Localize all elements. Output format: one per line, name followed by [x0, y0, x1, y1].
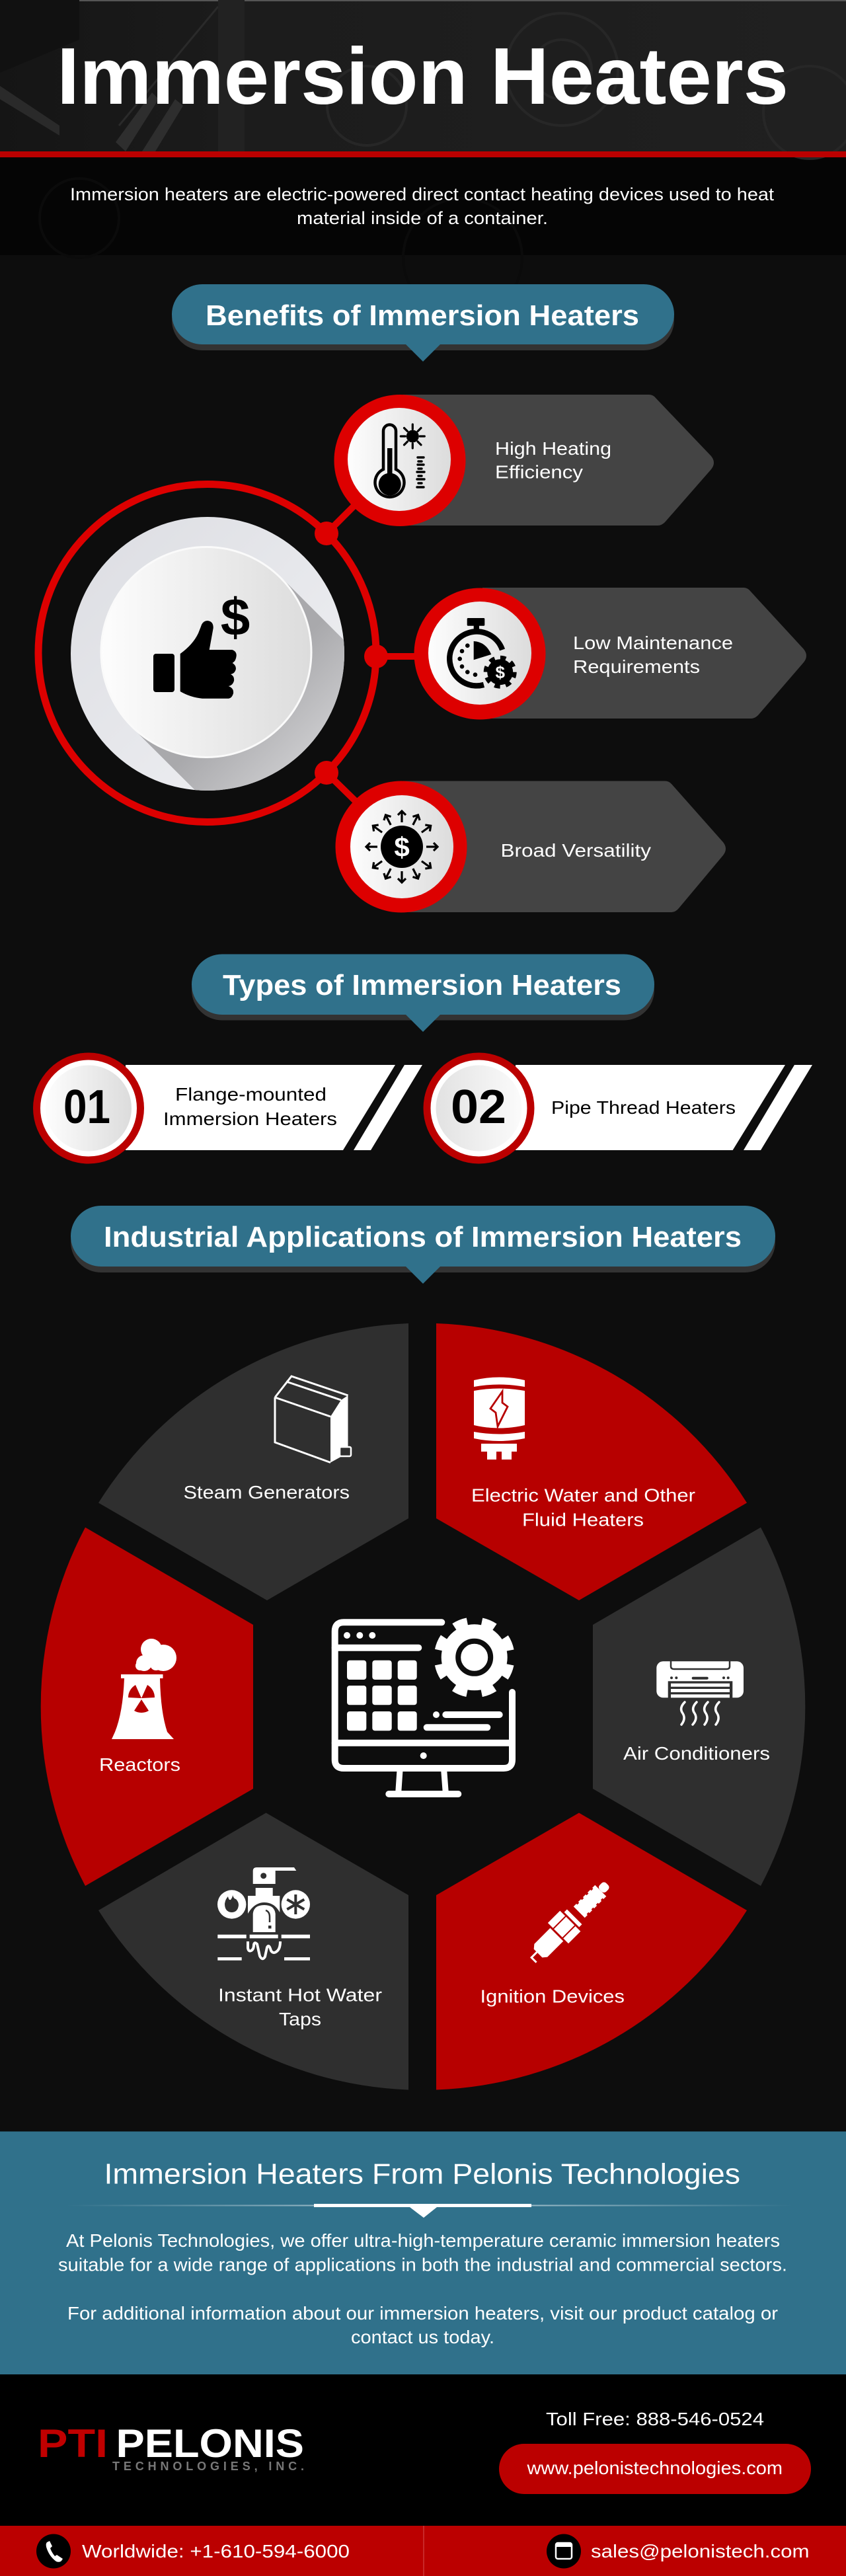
body copy: suitable for a wide range of applications in both the industrial and commercial sectors.	[58, 2254, 787, 2275]
header banner with photo texture	[0, 0, 846, 317]
connectors and ring	[38, 484, 415, 822]
body copy: At Pelonis Technologies, we offer ultra-high-temperature ceramic immersion heaters	[66, 2230, 780, 2251]
benefit: low maintenance: Low Maintenance	[573, 633, 733, 653]
logo: TECHNOLOGIES, INC.	[112, 2460, 304, 2473]
panel: benefits diagram	[38, 395, 806, 912]
heading: types: Types of Immersion Heaters	[223, 969, 621, 1001]
type 01: flange-mounted: Immersion Heaters	[163, 1109, 337, 1129]
segment: air conditioners	[593, 1528, 805, 1886]
segment: steam generators	[98, 1323, 408, 1600]
segment: reactors	[41, 1528, 253, 1886]
heading divider with pointer	[66, 2204, 793, 2218]
icon: thumbs up with dollar: $	[221, 588, 250, 646]
footer band	[0, 2374, 846, 2526]
toll free number: Toll Free: 888-546-0524	[546, 2409, 764, 2429]
segment: steam generators: Steam Generators	[184, 1482, 350, 1503]
icon: monitor with gear	[335, 1621, 512, 1794]
benefit: high heating efficiency	[334, 395, 714, 526]
contact bar: Worldwide: +1-610-594-6000	[82, 2541, 350, 2561]
icon: dollar with radiating arrows	[366, 811, 438, 882]
website button	[499, 2444, 811, 2494]
icon: stopwatch and gear: $	[495, 662, 505, 682]
icon: thumbs up with dollar	[153, 588, 250, 699]
icon: hot and cold tap	[217, 1867, 310, 1961]
icon: email	[547, 2534, 581, 2569]
icon: air conditioner	[656, 1661, 744, 1725]
contact bar: sales@pelonistech.com	[591, 2541, 809, 2561]
benefit: low maintenance	[414, 588, 806, 719]
icon: thermometer and sun	[375, 424, 424, 497]
central disc	[71, 517, 344, 791]
logo: PELONIS	[116, 2421, 304, 2466]
icon: phone	[36, 2534, 71, 2569]
panel: about Pelonis Technologies	[0, 2131, 846, 2374]
panel heading: Immersion Heaters From Pelonis Technologies	[104, 2158, 740, 2191]
benefit: broad versatility: Broad Versatility	[501, 840, 651, 861]
segment: electric water heaters	[436, 1323, 747, 1600]
segment: ignition devices	[436, 1813, 747, 2090]
panel: applications wheel	[41, 1323, 805, 2090]
title: Immersion Heaters	[57, 31, 788, 121]
benefit: high heating efficiency: Efficiency	[495, 461, 583, 483]
heading: types	[192, 955, 654, 1032]
segment: electric water heaters: Fluid Heaters	[522, 1510, 644, 1530]
heading: applications	[71, 1206, 775, 1284]
contact bar	[0, 2526, 846, 2576]
body copy: contact us today.	[351, 2327, 494, 2347]
icon: cooling tower	[112, 1639, 176, 1739]
type 01: flange-mounted	[33, 1052, 422, 1163]
segment: ignition devices: Ignition Devices	[480, 1986, 625, 2007]
logo	[38, 2421, 304, 2473]
intro text: Immersion heaters are electric-powered direct contact heating devices used to heat	[70, 184, 775, 204]
icon: electric water heater	[474, 1378, 525, 1460]
icon: stopwatch and gear	[449, 618, 514, 686]
segment: air conditioners: Air Conditioners	[623, 1743, 770, 1764]
type 01: flange-mounted: 01	[63, 1081, 110, 1134]
segment: reactors: Reactors	[99, 1754, 180, 1775]
benefit: low maintenance: Requirements	[573, 656, 700, 677]
segment: instant hot water taps: Instant Hot Water	[218, 1985, 382, 2006]
type 02: pipe thread: Pipe Thread Heaters	[551, 1097, 736, 1118]
segment: instant hot water taps: Taps	[279, 2009, 321, 2029]
website button: www.pelonistechnologies.com	[526, 2458, 783, 2478]
body copy	[58, 2230, 787, 2347]
benefit: broad versatility	[336, 781, 726, 912]
body copy: For additional information about our immersion heaters, visit our product catalog or	[67, 2303, 778, 2323]
icon: spark plug	[521, 1874, 617, 1970]
logo: PTI	[38, 2421, 108, 2466]
intro text: material inside of a container.	[297, 208, 548, 228]
type 01: flange-mounted: Flange-mounted	[175, 1084, 327, 1105]
type 02: pipe thread: 02	[451, 1081, 506, 1134]
heading: benefits: Benefits of Immersion Heaters	[206, 299, 639, 332]
red header rule	[0, 151, 846, 157]
intro text	[70, 184, 775, 228]
icon: steam generator	[275, 1376, 351, 1462]
icon: dollar with radiating arrows: $	[394, 832, 410, 863]
benefit: high heating efficiency: High Heating	[495, 438, 611, 459]
heading: benefits	[172, 284, 674, 362]
segment: electric water heaters: Electric Water and Other	[471, 1485, 695, 1506]
segment: instant hot water taps	[98, 1813, 408, 2090]
heading: applications: Industrial Applications of Immersion Heaters	[104, 1221, 742, 1253]
type 02: pipe thread	[423, 1052, 812, 1163]
